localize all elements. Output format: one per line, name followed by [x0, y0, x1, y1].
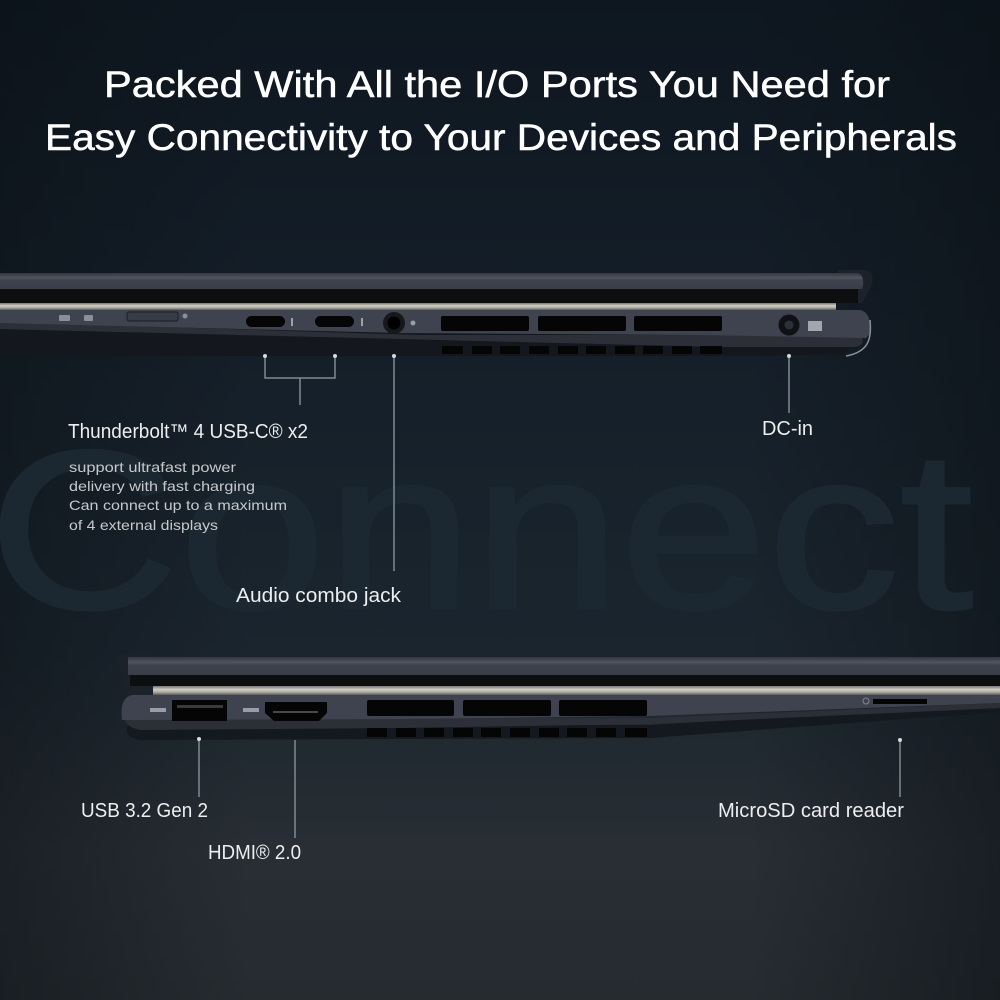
Thunderbolt marks: [291, 318, 363, 326]
upper laptop base: [0, 310, 870, 338]
callout: DC-in connector: [787, 354, 791, 413]
label: USB: USB 3.2 Gen 2: [81, 800, 208, 822]
hinge curve: [846, 320, 870, 356]
upper laptop chrome strip: [0, 303, 836, 310]
Thunderbolt description: of 4 external displays: [69, 517, 218, 533]
lower vents: [442, 346, 722, 354]
microSD slot: [863, 698, 927, 704]
lower laptop, left side view: [119, 655, 1000, 740]
callout: microSD connector: [898, 738, 902, 797]
lower laptop lower band: [124, 703, 1000, 730]
HDMI port: [243, 702, 327, 721]
callout: audio connector: [392, 354, 396, 571]
lower laptop base: [121, 695, 1000, 720]
lower laptop bottom vents: [367, 728, 647, 737]
lower laptop base shadow: [126, 705, 1000, 740]
callout: USB connector: [197, 737, 201, 797]
upper laptop base shadow: [0, 326, 850, 356]
upper laptop lower band: [0, 322, 863, 347]
Thunderbolt description: delivery with fast charging: [69, 478, 255, 494]
lower laptop vents: [367, 700, 647, 716]
upper vents: [441, 316, 722, 331]
callout: Thunderbolt connectors: [263, 354, 337, 405]
upper laptop hinge: [838, 270, 873, 303]
indicator marks: [59, 314, 188, 321]
DC-in port: [778, 314, 822, 336]
label: HDMI: HDMI® 2.0: [208, 842, 301, 864]
upper laptop, right side view: [0, 270, 873, 356]
Thunderbolt ports: [246, 316, 354, 327]
Thunderbolt description: Can connect up to a maximum: [69, 497, 287, 513]
lower laptop lid: [128, 657, 1000, 675]
title: [45, 64, 957, 158]
label: Thunderbolt: Thunderbolt™ 4 USB-C® x2: [68, 421, 308, 443]
label: MicroSD: MicroSD card reader: [718, 800, 904, 822]
watermark word: Connect: [0, 403, 973, 656]
power button: [127, 312, 178, 321]
lower laptop gap: [130, 675, 1000, 686]
callout: HDMI connector: [294, 740, 296, 838]
label: DC-in: DC-in: [762, 418, 813, 440]
label: Audio combo jack: Audio combo jack: [236, 585, 402, 607]
Thunderbolt description: [69, 459, 287, 533]
lower laptop hinge: [119, 655, 154, 695]
title: Packed With All the I/O Ports You Need for: [104, 64, 890, 105]
upper laptop gap: [0, 289, 858, 303]
audio jack: [383, 312, 416, 334]
Thunderbolt description: support ultrafast power: [69, 459, 236, 475]
lower laptop chrome strip: [153, 686, 1000, 695]
title: Easy Connectivity to Your Devices and Peripherals: [45, 117, 957, 158]
USB-A port: [150, 700, 227, 721]
upper laptop lid: [0, 273, 863, 289]
